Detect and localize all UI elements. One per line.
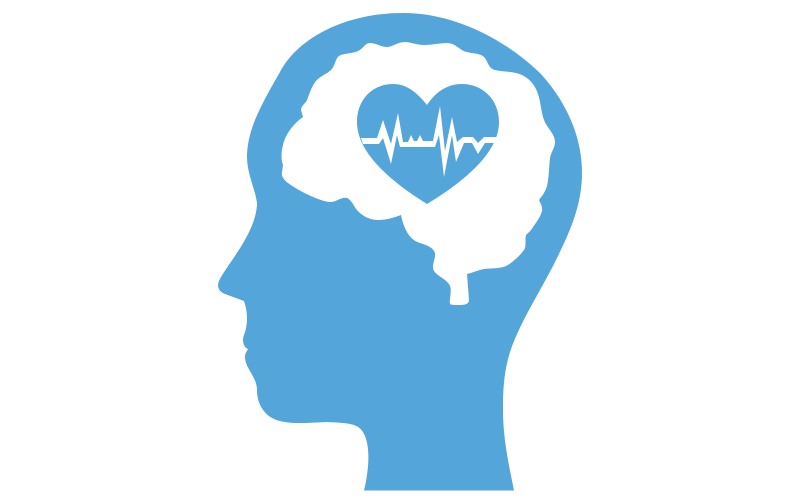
icon: heartbeat pulse line [361,106,497,177]
icon: brain [282,42,555,305]
icon: heart [357,84,499,204]
icon: head profile silhouette [218,13,582,490]
